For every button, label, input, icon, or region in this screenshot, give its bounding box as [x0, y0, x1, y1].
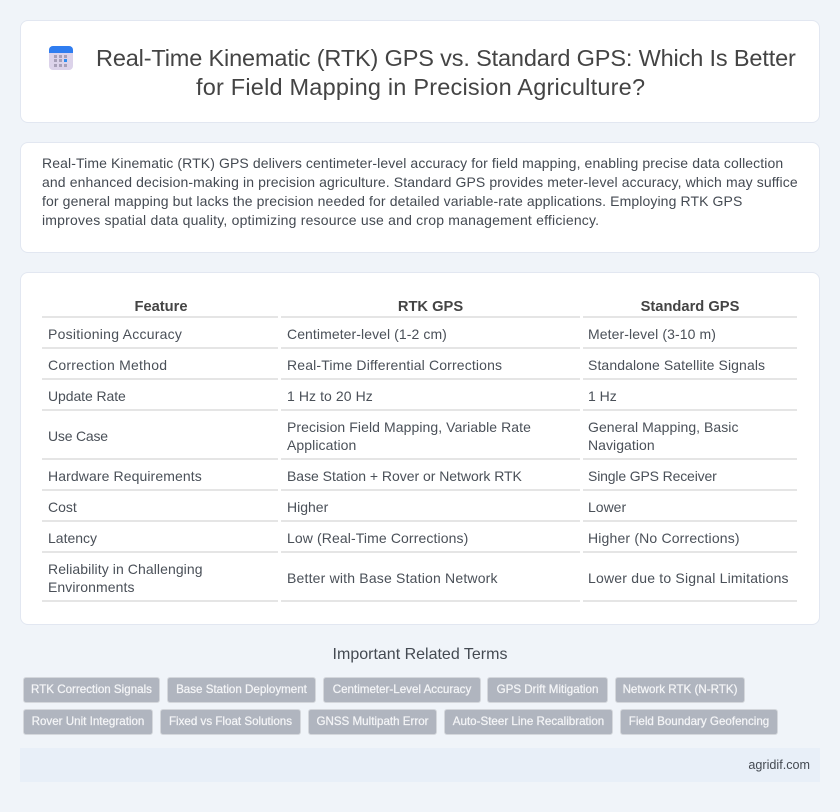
- row: correction method: Correction Method: [48, 357, 167, 373]
- row: hardware requirements: Base Station + Rover or Network RTK: [287, 468, 522, 484]
- row: cost: Higher: [287, 499, 328, 515]
- panel: comparison table: [20, 272, 820, 625]
- row: use case: Use Case: [48, 428, 108, 444]
- row: latency: Latency: [48, 530, 97, 546]
- row: latency: [48, 530, 740, 546]
- row: reliability: Environments: [48, 579, 135, 595]
- related terms tags: RTK Correction Signals: [31, 683, 152, 696]
- icon: calendar: [49, 46, 73, 70]
- text block: introduction: improves spatial data quality, optimizing resource use and crop management efficiency.: [42, 212, 599, 228]
- related terms tags: Centimeter-Level Accuracy: [333, 683, 471, 696]
- related terms tags: Rover Unit Integration: [32, 715, 144, 728]
- row: latency: Higher (No Corrections): [588, 530, 740, 546]
- related terms tags: Auto-Steer Line Recalibration: [453, 715, 604, 728]
- row: positioning accuracy: Meter-level (3-10 m): [588, 326, 716, 342]
- row: correction method: [48, 357, 765, 373]
- footer bar: [20, 748, 820, 782]
- row: use case: Navigation: [588, 437, 655, 453]
- row: update rate: [48, 388, 617, 404]
- row: positioning accuracy: Centimeter-level (1-2 cm): [287, 326, 447, 342]
- row: reliability: Lower due to Signal Limitations: [588, 570, 789, 586]
- row: cost: [48, 499, 626, 515]
- table header: Feature: [134, 299, 188, 315]
- row: update rate: 1 Hz: [588, 388, 617, 404]
- row: cost: Lower: [588, 499, 626, 515]
- row: reliability: Better with Base Station Network: [287, 570, 498, 586]
- row: correction method: Standalone Satellite Signals: [588, 357, 765, 373]
- comparison table: [42, 299, 797, 602]
- table header: RTK GPS: [398, 299, 463, 315]
- heading: related terms: Important Related Terms: [333, 646, 507, 663]
- title: Real-Time Kinematic (RTK) GPS vs. Standard GPS: Which Is Better: [96, 45, 796, 71]
- row: hardware requirements: Single GPS Receiver: [588, 468, 717, 484]
- row: correction method: Real-Time Differential Corrections: [287, 357, 502, 373]
- panel: introduction: [20, 142, 820, 253]
- table header: Standard GPS: [641, 299, 739, 315]
- row: cost: Cost: [48, 499, 77, 515]
- row: use case: Application: [287, 437, 356, 453]
- text block: introduction: Real-Time Kinematic (RTK) GPS delivers centimeter-level accuracy for field mapping, enabling precise data collection: [42, 155, 783, 171]
- text block: introduction: [42, 155, 798, 228]
- row: hardware requirements: Hardware Requirements: [48, 468, 202, 484]
- footer source: agridif.com: [748, 758, 810, 772]
- row: use case: Precision Field Mapping, Variable Rate: [287, 419, 531, 435]
- row: use case: [48, 419, 739, 453]
- panel: title card: [20, 20, 820, 123]
- related terms tags: Base Station Deployment: [176, 683, 307, 696]
- row: latency: Low (Real-Time Corrections): [287, 530, 468, 546]
- row: reliability: Reliability in Challenging: [48, 561, 203, 577]
- text block: introduction: for general mapping but lacks the precision needed for detailed variable-rate applications. Employing RTK GPS: [42, 193, 742, 209]
- row: reliability: [48, 561, 789, 595]
- related terms tags: GNSS Multipath Error: [316, 715, 429, 728]
- table header: [134, 299, 739, 315]
- related terms tags: Network RTK (N-RTK): [623, 683, 737, 696]
- related terms tags: Field Boundary Geofencing: [629, 715, 769, 728]
- text block: introduction: and enhanced decision-making in precision agriculture. Standard GPS provides meter-level accuracy, which may suffice: [42, 174, 798, 190]
- related terms tags: [23, 677, 778, 735]
- related terms tags: GPS Drift Mitigation: [497, 683, 598, 696]
- row: hardware requirements: [48, 468, 717, 484]
- row: update rate: Update Rate: [48, 388, 126, 404]
- title: for Field Mapping in Precision Agriculture?: [196, 74, 645, 100]
- row: use case: General Mapping, Basic: [588, 419, 739, 435]
- related terms tags: Fixed vs Float Solutions: [169, 715, 292, 728]
- row: update rate: 1 Hz to 20 Hz: [287, 388, 373, 404]
- title: [96, 45, 796, 100]
- row: positioning accuracy: [48, 326, 716, 342]
- row: positioning accuracy: Positioning Accuracy: [48, 326, 182, 342]
